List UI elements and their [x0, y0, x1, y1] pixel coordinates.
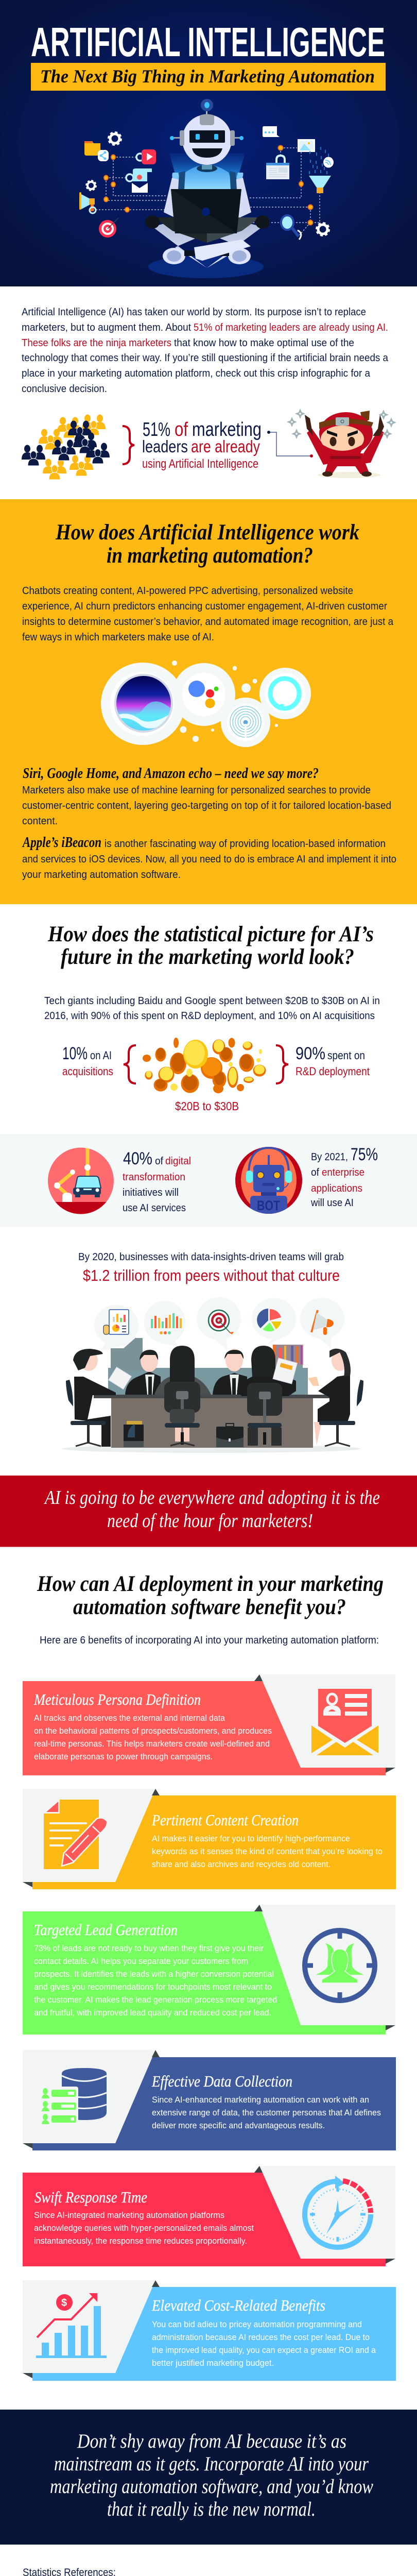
- stat: 90 percent: 90%: [296, 1044, 325, 1063]
- stat: 75 percent: of: [311, 1167, 319, 1178]
- panel: stats band: [0, 1134, 417, 1227]
- stat: 40 percent: digital: [165, 1156, 191, 1167]
- briefcase: [216, 1423, 244, 1447]
- icon: target: [208, 1310, 234, 1334]
- right brace: [276, 1045, 288, 1083]
- card 5: response time: [23, 2166, 395, 2266]
- icon: folder: [84, 141, 100, 156]
- stat: 51 percent: using Artificial Intelligence: [142, 457, 258, 471]
- intro text: conclusive decision.: [22, 383, 107, 395]
- body: on the behavioral patterns of prospects/customers, and produces: [34, 1726, 272, 1736]
- body: real-time personas. This helps marketers create well-defined and: [34, 1739, 270, 1749]
- stat: 1.2 trillion: [78, 1251, 344, 1284]
- person: back left in chair: [154, 1346, 211, 1446]
- icon: growth chart: $: [61, 2297, 67, 2309]
- body: extensive range of data, the customer personas that AI defines: [152, 2108, 381, 2117]
- stat: 75 percent: will use AI: [310, 1197, 354, 1209]
- stat: 90 percent: spent on: [327, 1049, 365, 1062]
- body: [152, 2320, 376, 2368]
- body: AI makes it easier for you to identify high-performance: [152, 1834, 350, 1843]
- icon: ninja: [287, 409, 396, 478]
- body text: Chatbots creating content, AI-powered PPC advertising, personalized website: [22, 585, 353, 597]
- body: share and also archives and recycles old content.: [152, 1860, 331, 1869]
- icon: report: [103, 1310, 129, 1334]
- icon: lock page: [266, 156, 289, 179]
- panel: closing message: Don’t shy away from AI because it’s as: [77, 2430, 346, 2452]
- panel: how AI works: [0, 499, 417, 904]
- stat: 40 percent: transformation: [123, 1172, 185, 1183]
- body text: Marketers also make use of machine learning for personalized searches to provide: [22, 785, 371, 796]
- voice assistant icons: [101, 660, 311, 747]
- icon: Echo: [227, 704, 264, 741]
- file holder: [124, 1421, 144, 1447]
- icon: gear right: [317, 223, 329, 235]
- icon: gear: [109, 132, 121, 145]
- icon: video: [136, 149, 156, 164]
- banner: adoption callout: need of the hour for marketers!: [107, 1510, 313, 1532]
- heading: statistical picture: How does the statistical picture for AI’s: [47, 922, 374, 946]
- body text: iBeacon: your marketing automation software.: [22, 869, 181, 880]
- title: Targeted Lead Generation: [34, 1921, 178, 1939]
- subheading: Siri, Google Home: Siri, Google Home, and Amazon echo – need we say more?: [23, 766, 319, 782]
- person: front left: [125, 1349, 161, 1395]
- stat: 51 percent: of: [175, 419, 188, 440]
- body: 73% of leads are not ready to buy when they first give you their: [34, 1944, 264, 1953]
- body: [34, 2211, 254, 2246]
- stat: 51 percent: leaders: [142, 437, 188, 456]
- icon: growth chart: [36, 2293, 107, 2358]
- intro text: Artificial Intelligence (AI) has taken our world by storm. Its purpose isn’t to replace: [22, 307, 366, 318]
- card 1: persona definition: [23, 1674, 395, 1775]
- body text: [22, 785, 391, 827]
- icon: chat bubble: [263, 126, 280, 137]
- body: the customer. AI makes the lead generation process more targeted: [34, 1995, 277, 2005]
- body: the improved lead quality, you can expect a greater ROI and a: [152, 2346, 376, 2355]
- person: left seated: [66, 1349, 131, 1447]
- stat: 40 percent: [123, 1149, 191, 1214]
- card 2: content creation: [23, 1789, 396, 1889]
- body text: iBeacon: Apple’s iBeacon: [22, 835, 101, 851]
- icon: pie: [257, 1309, 281, 1331]
- heading: benefits: automation software benefit you?: [73, 1595, 346, 1619]
- intro text: technology that comes their way. If you’re still questioning if the artificial brain needs a: [22, 352, 389, 364]
- body: Since AI-integrated marketing automation platforms: [34, 2211, 224, 2220]
- text: tech giants: Tech giants including Baidu and Google spent between $20B to $30B on AI in: [44, 995, 380, 1007]
- banner: adoption callout: [0, 1476, 417, 1547]
- body: elaborate personas to power through campaigns.: [34, 1752, 213, 1761]
- stat: 10 percent: [62, 1044, 113, 1078]
- stat: 75 percent: By 2021,: [311, 1151, 348, 1163]
- body: acknowledge queries with hyper-personalized emails almost: [34, 2224, 254, 2233]
- card 4: data collection: [23, 2050, 396, 2150]
- body: You can bid adieu to pricey automation programming and: [152, 2320, 362, 2329]
- intro text: 51% of marketing leaders are already using AI.: [194, 322, 388, 333]
- title: Elevated Cost-Related Benefits: [151, 2296, 325, 2314]
- card 3: lead generation: [23, 1905, 395, 2035]
- panel: closing message: [0, 2410, 417, 2545]
- icon: funnel: [309, 176, 331, 193]
- stat: 51 percent: marketing: [192, 419, 262, 440]
- robot: [145, 99, 270, 278]
- body: [34, 1714, 272, 1761]
- body text: iBeacon: and services to iOS devices. Now, all you need to do is embrace AI and implement it into: [22, 854, 396, 865]
- stat: 40 percent: use AI services: [123, 1202, 186, 1214]
- heading: statistical picture: future in the marketing world look?: [61, 945, 354, 969]
- stat: 75 percent: 75%: [351, 1145, 378, 1164]
- intro text: marketers, but to augment them. About: [22, 322, 191, 333]
- intro text: [22, 307, 389, 395]
- icon: magnifier: [281, 215, 301, 240]
- panel: hero: [0, 0, 417, 286]
- body: and gives you recommendations for touchpoints most relevant to: [34, 1982, 272, 1992]
- stat: 75 percent: [310, 1145, 378, 1209]
- icon: Alexa: [265, 673, 305, 714]
- table: [94, 1395, 331, 1448]
- body text: experience, AI churn predictors enhancing customer engagement, AI-driven customer: [22, 601, 387, 612]
- intro to benefits: Here are 6 benefits of incorporating AI into your marketing automation platform:: [40, 1635, 379, 1646]
- heading: benefits: [37, 1572, 384, 1619]
- body: [152, 2095, 381, 2130]
- title: Swift Response Time: [34, 2188, 147, 2206]
- card 6: cost benefits: [23, 2280, 396, 2381]
- icon: Google Assistant: [182, 673, 225, 716]
- icon: clock: [305, 2176, 371, 2247]
- heading: in marketing automation?: [107, 544, 313, 568]
- icon: data rain: [309, 147, 328, 174]
- stat: 40 percent: of: [155, 1156, 163, 1167]
- backdrop and shelves: [108, 1337, 308, 1396]
- body text: customer-centric content, layering geo-targeting on top of it for tailored location-based: [22, 800, 391, 811]
- icon: target: [99, 218, 118, 238]
- body: prospects. It identifies the leads with a higher conversion potential: [34, 1970, 274, 1979]
- body text: content.: [22, 816, 58, 827]
- icon: bars: [151, 1313, 182, 1334]
- person: back right in chair: [237, 1346, 298, 1446]
- label: spend range: $20B to $30B: [175, 1099, 239, 1113]
- body: instantaneously, the response time reduces proportionally.: [34, 2236, 247, 2246]
- title: Meticulous Persona Definition: [33, 1690, 201, 1708]
- stat: 40 percent: 40%: [123, 1149, 152, 1168]
- body text: iBeacon: is another fascinating way of providing location-based information: [105, 838, 386, 850]
- illustration: team meeting: [62, 1297, 363, 1453]
- stat: 1.2 trillion: By 2020, businesses with data-insights-driven teams will grab: [78, 1251, 344, 1263]
- icon: database: [42, 2068, 107, 2128]
- heading: benefits: How can AI deployment in your marketing: [37, 1572, 384, 1596]
- person: right seated: [308, 1349, 363, 1446]
- title: Pertinent Content Creation: [151, 1811, 299, 1829]
- icon: target persona: [305, 1930, 375, 2001]
- body: [34, 1944, 277, 2018]
- panel: closing message: that it really is the new normal.: [107, 2498, 316, 2520]
- icon: Siri: [110, 672, 174, 736]
- body: deliver more specific and advantageous results.: [152, 2121, 325, 2130]
- body text: few ways in which marketers make use of AI.: [22, 632, 214, 643]
- icon: gold coins: [143, 1038, 266, 1093]
- body: [152, 1834, 383, 1869]
- icon: robotic arm and car: [46, 1148, 116, 1215]
- icon: image: [298, 139, 315, 152]
- stat: 75 percent: enterprise: [322, 1167, 364, 1178]
- icon: document and pencil: [44, 1800, 107, 1869]
- network nodes: [104, 145, 313, 225]
- stat: 1.2 trillion: $1.2 trillion from peers without that culture: [83, 1266, 340, 1284]
- text: tech giants: 2016, with 90% of this spent on R&D deployment, and 10% on AI acquisitions: [44, 1010, 375, 1022]
- stat: 10 percent: on AI: [90, 1049, 112, 1062]
- icon: bot with headset: BOT: [257, 1198, 280, 1213]
- stat: 75 percent: applications: [311, 1183, 362, 1194]
- stat: 90 percent: R&D deployment: [296, 1065, 370, 1078]
- speech bubbles: [94, 1297, 344, 1351]
- intro text: place in your marketing automation platform, check out this crisp infographic for a: [22, 368, 371, 379]
- people crowd icon: [22, 414, 110, 480]
- stat: 40 percent: initiatives will: [123, 1187, 179, 1198]
- stat: 51 percent: 51%: [143, 419, 170, 440]
- left brace: [124, 1045, 136, 1083]
- body: keywords as it senses the kind of content that you’re looking to: [152, 1847, 383, 1856]
- icon: persona envelope: [311, 1689, 378, 1755]
- icon: megaphone: [311, 1310, 334, 1335]
- heading: [55, 520, 359, 568]
- icon: small gear: [86, 181, 96, 190]
- stat: 10 percent: acquisitions: [62, 1065, 113, 1078]
- icon: bot with headset: [235, 1147, 302, 1214]
- icon: mail: [126, 168, 152, 193]
- subtitle banner: The Next Big Thing in Marketing Automation: [40, 66, 375, 87]
- stat: 10 percent: 10%: [62, 1044, 88, 1063]
- heading: How does Artificial Intelligence work: [55, 520, 359, 545]
- intro text: that know how to make optimal use of the: [174, 337, 354, 349]
- body: and fruitful, with improved lead quality and reduced cost per lead.: [34, 2008, 271, 2018]
- body: AI tracks and observes the external and internal data: [34, 1714, 225, 1723]
- stat: 51 percent: [142, 419, 262, 471]
- intro text: These folks are the ninja marketers: [22, 337, 171, 349]
- icon: megaphone: [79, 192, 96, 213]
- heading: statistical picture: [47, 922, 374, 969]
- icon: rss: [323, 157, 334, 168]
- body text: [22, 585, 394, 643]
- title: Effective Data Collection: [151, 2072, 292, 2090]
- connector: [267, 431, 313, 457]
- body text: iBeacon: [22, 835, 396, 880]
- body: contact details. AI helps you separate your customers from: [34, 1957, 248, 1966]
- body: administration because AI reduces the cost per lead. Due to: [152, 2333, 370, 2342]
- body text: insights to determine customer’s behavior, and automated image recognition, are just a: [22, 616, 394, 628]
- person: front right: [213, 1349, 247, 1395]
- network lines: [93, 148, 320, 236]
- body: better justified marketing budget.: [152, 2359, 274, 2368]
- icon: share: [98, 150, 109, 161]
- text: tech giants: [44, 995, 380, 1022]
- stat: 90 percent: [296, 1044, 370, 1078]
- brace: [123, 426, 134, 464]
- body: Since AI-enhanced marketing automation can work with an: [152, 2095, 369, 2105]
- stat: 51 percent: are already: [191, 437, 260, 456]
